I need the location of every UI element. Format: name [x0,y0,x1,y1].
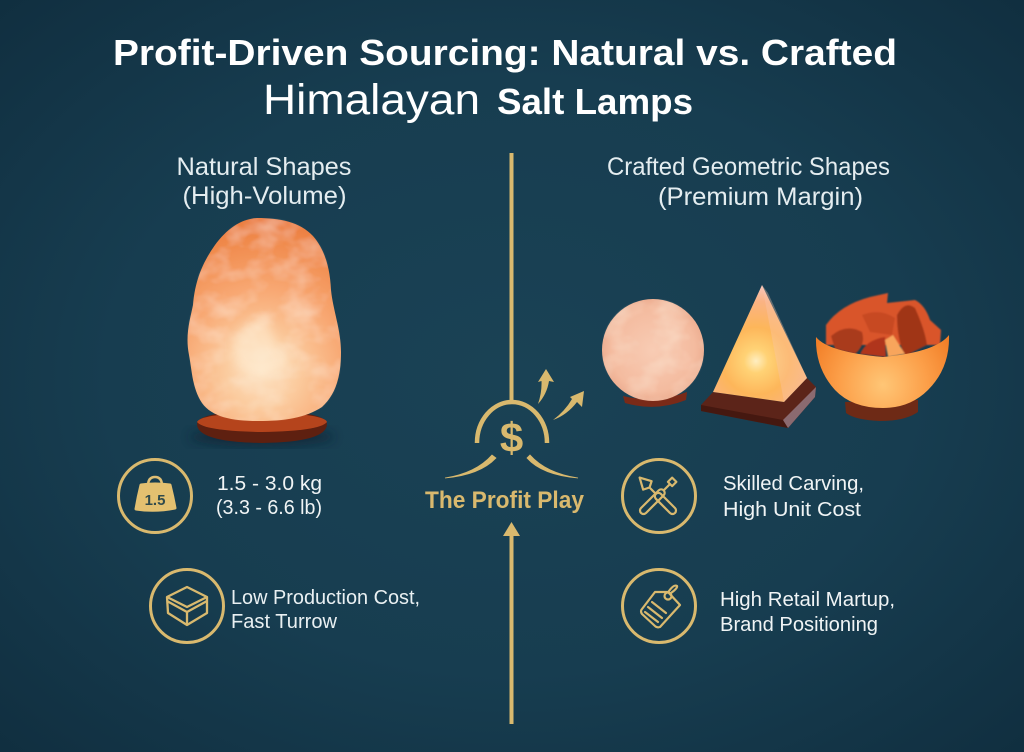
heading: crafted shapes [607,153,890,211]
lamp: sphere [602,299,704,407]
heading: natural shapes: (High-Volume) [182,182,346,210]
lamp: bowl with rocks [816,293,949,421]
text: production cost: Fast Turrow [231,611,338,633]
text: weight [216,473,322,519]
icon: crossed tools [622,460,696,532]
icon: price tag [622,570,696,642]
icon: box [150,570,224,642]
text: weight: (3.3 - 6.6 lb) [216,497,322,519]
stat: markup [622,570,895,642]
stat: carving [622,460,864,532]
text: carving [723,473,864,521]
heading: natural shapes: Natural Shapes [176,153,352,181]
stat: weight [118,460,322,532]
icon: dollar dome [445,402,578,478]
text: weight: 1.5 - 3.0 kg [217,473,322,495]
heading: natural shapes [176,153,352,210]
text: markup [720,589,895,636]
title: Himalayan [263,76,480,124]
arrow: up growth [538,369,554,404]
heading: crafted shapes: (Premium Margin) [658,183,863,211]
title [113,32,897,124]
lamp: natural rock [188,218,341,447]
divider upper line [510,153,514,401]
text: markup: High Retail Martup, [720,589,895,611]
title: Profit-Driven Sourcing: Natural vs. Crafted [113,32,897,73]
text: carving: High Unit Cost [723,499,861,521]
heading: crafted shapes: Crafted Geometric Shapes [607,153,890,181]
central divider with profit play [425,153,585,724]
arrow: right growth [553,391,584,420]
label: the profit play: The Profit Play [425,487,585,514]
icon: weight bag: 1.5 [145,492,165,509]
icon: weight bag [118,460,192,532]
text: markup: Brand Positioning [720,614,878,636]
icon: dollar dome: $ [500,414,523,461]
text: production cost [231,587,420,633]
stat: production cost [150,570,420,642]
lamp: pyramid [701,285,816,428]
divider lower arrow [503,522,520,724]
title: Salt Lamps [497,81,693,122]
text: production cost: Low Production Cost, [231,587,420,609]
text: carving: Skilled Carving, [723,473,864,495]
